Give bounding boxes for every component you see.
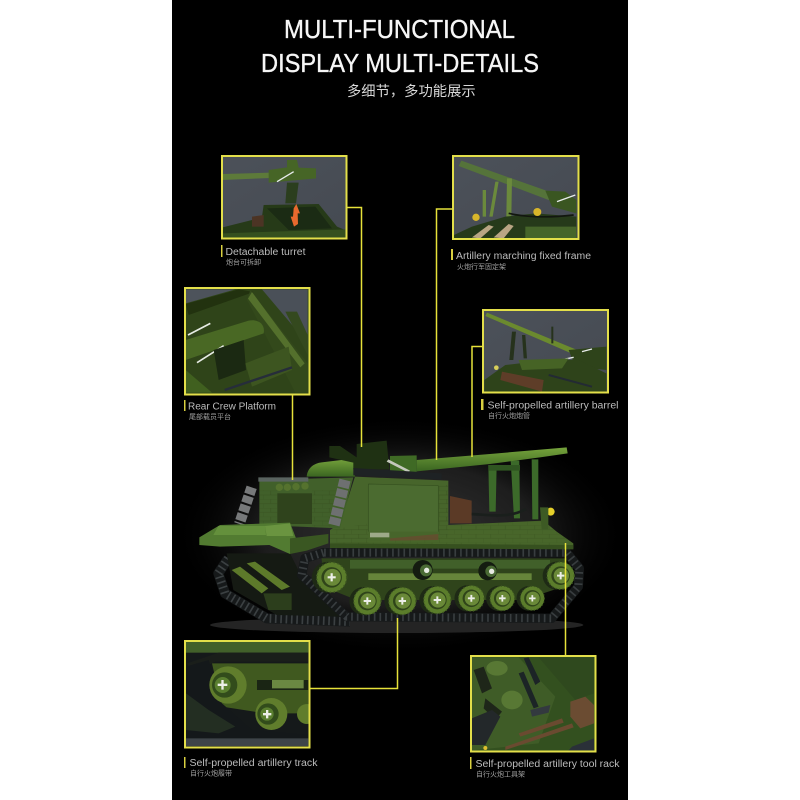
connector line	[472, 346, 482, 457]
connector line	[310, 618, 398, 688]
label: Rear Crew Platform	[188, 402, 276, 412]
dark rail	[353, 468, 442, 479]
tank model	[199, 441, 583, 633]
photo: tool rack	[469, 655, 597, 753]
callout: tool rack	[469, 543, 621, 778]
black poster background	[172, 0, 628, 800]
barrel	[417, 447, 568, 471]
Chinese label: 自行火炮履带	[190, 768, 232, 778]
deck side	[330, 521, 573, 549]
subtitle: 多细节，多功能展示	[347, 83, 476, 100]
Chinese label: 自行火炮炮管	[488, 411, 530, 420]
gun mount	[329, 441, 389, 469]
front nose	[199, 523, 297, 554]
road wheels	[312, 562, 574, 615]
label: Artillery marching fixed frame	[456, 251, 591, 262]
frame	[185, 641, 310, 748]
frame	[483, 310, 608, 392]
frame	[471, 656, 596, 752]
photo: rear platform	[184, 287, 310, 395]
rear plate	[259, 477, 353, 528]
yellow tick	[470, 757, 472, 769]
label: Self-propelled artillery tool rack	[476, 759, 621, 770]
dark undercarriage	[227, 553, 343, 617]
Chinese label: 尾部载员平台	[189, 412, 231, 421]
Chinese label: 炮台可拆卸	[226, 258, 261, 266]
yellow tick	[184, 400, 186, 411]
yellow tick	[481, 399, 484, 410]
Chinese label: 火炮行军固定架	[457, 262, 506, 271]
spare track left	[239, 487, 252, 524]
recoil cylinder	[390, 455, 417, 472]
yellow tick	[221, 245, 222, 257]
breech cylinder	[307, 458, 355, 477]
title	[261, 14, 539, 78]
yellow light	[540, 507, 555, 529]
spare track right	[334, 480, 345, 525]
connector line	[436, 209, 452, 460]
Chinese label: 自行火炮工具架	[476, 770, 525, 778]
connector line	[292, 395, 294, 480]
yellow tick	[184, 757, 186, 768]
frame	[222, 156, 346, 238]
photo: barrel	[482, 310, 609, 393]
frame legs	[488, 459, 538, 519]
frame	[185, 288, 310, 394]
glow behind tank	[172, 415, 628, 655]
hose	[472, 509, 526, 515]
main track loop	[302, 553, 579, 618]
label: Detachable turret	[226, 247, 306, 258]
frame	[453, 156, 578, 239]
connector line	[564, 543, 566, 655]
floor reflection	[210, 617, 583, 633]
label: Self-propelled artillery track	[190, 758, 319, 769]
callout: detachable turret	[219, 153, 362, 447]
photo: marching frame	[452, 155, 579, 242]
callout: rear crew platform	[184, 287, 310, 480]
return rollers	[413, 560, 433, 580]
suspension slats	[232, 562, 290, 593]
label: Self-propelled artillery barrel	[488, 400, 618, 412]
main side plate	[330, 477, 448, 543]
title: DISPLAY MULTI-DETAILS	[261, 48, 539, 78]
return roller right	[478, 562, 497, 580]
running gear housing	[322, 558, 567, 600]
brown stowage	[450, 496, 472, 523]
photo: detachable turret	[223, 157, 346, 238]
hull rivets	[276, 482, 309, 491]
photo: track	[186, 642, 308, 746]
yellow tick	[451, 249, 453, 260]
title: MULTI-FUNCTIONAL	[284, 14, 515, 44]
connector line	[347, 208, 362, 447]
rear idler track loop	[218, 558, 350, 622]
callout: self-propelled artillery barrel	[472, 310, 618, 457]
callout: artillery marching fixed frame	[436, 155, 591, 460]
callout: track	[184, 618, 398, 778]
